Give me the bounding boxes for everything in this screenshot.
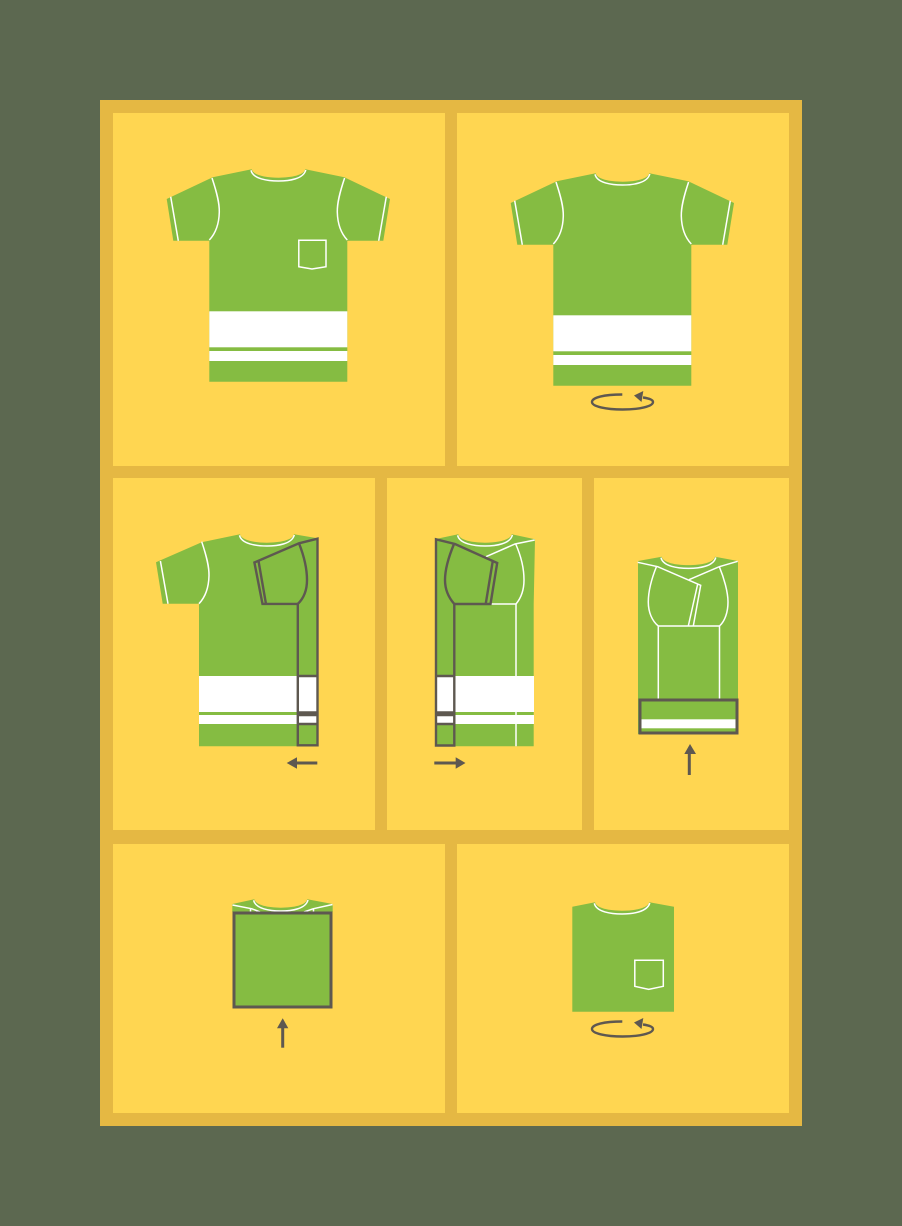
fold outline	[254, 539, 318, 745]
icon: rotate arrow, final step	[592, 1018, 653, 1036]
pocket	[299, 240, 326, 269]
fold outline	[436, 539, 497, 746]
arrow: fold right	[434, 757, 466, 769]
step 1: shirt front with pocket	[167, 169, 390, 382]
arrow: fold up	[684, 744, 696, 775]
outer frame	[100, 100, 802, 1126]
step 4: left side folded in	[436, 534, 535, 746]
panels	[113, 113, 789, 1113]
step 3: right side folded in	[156, 534, 318, 746]
step 6: second bottom fold	[232, 899, 333, 1007]
fold square	[234, 913, 331, 1007]
step 7: finished folded shirt	[572, 902, 674, 1012]
arrow: fold up	[277, 1018, 288, 1048]
step 5: bottom fold	[638, 557, 738, 734]
arrow: fold left	[287, 757, 317, 769]
step 2: shirt turned over	[511, 173, 734, 386]
fold outline	[640, 700, 737, 733]
icon: rotate arrow, step 2	[592, 391, 653, 410]
pocket	[635, 960, 663, 989]
